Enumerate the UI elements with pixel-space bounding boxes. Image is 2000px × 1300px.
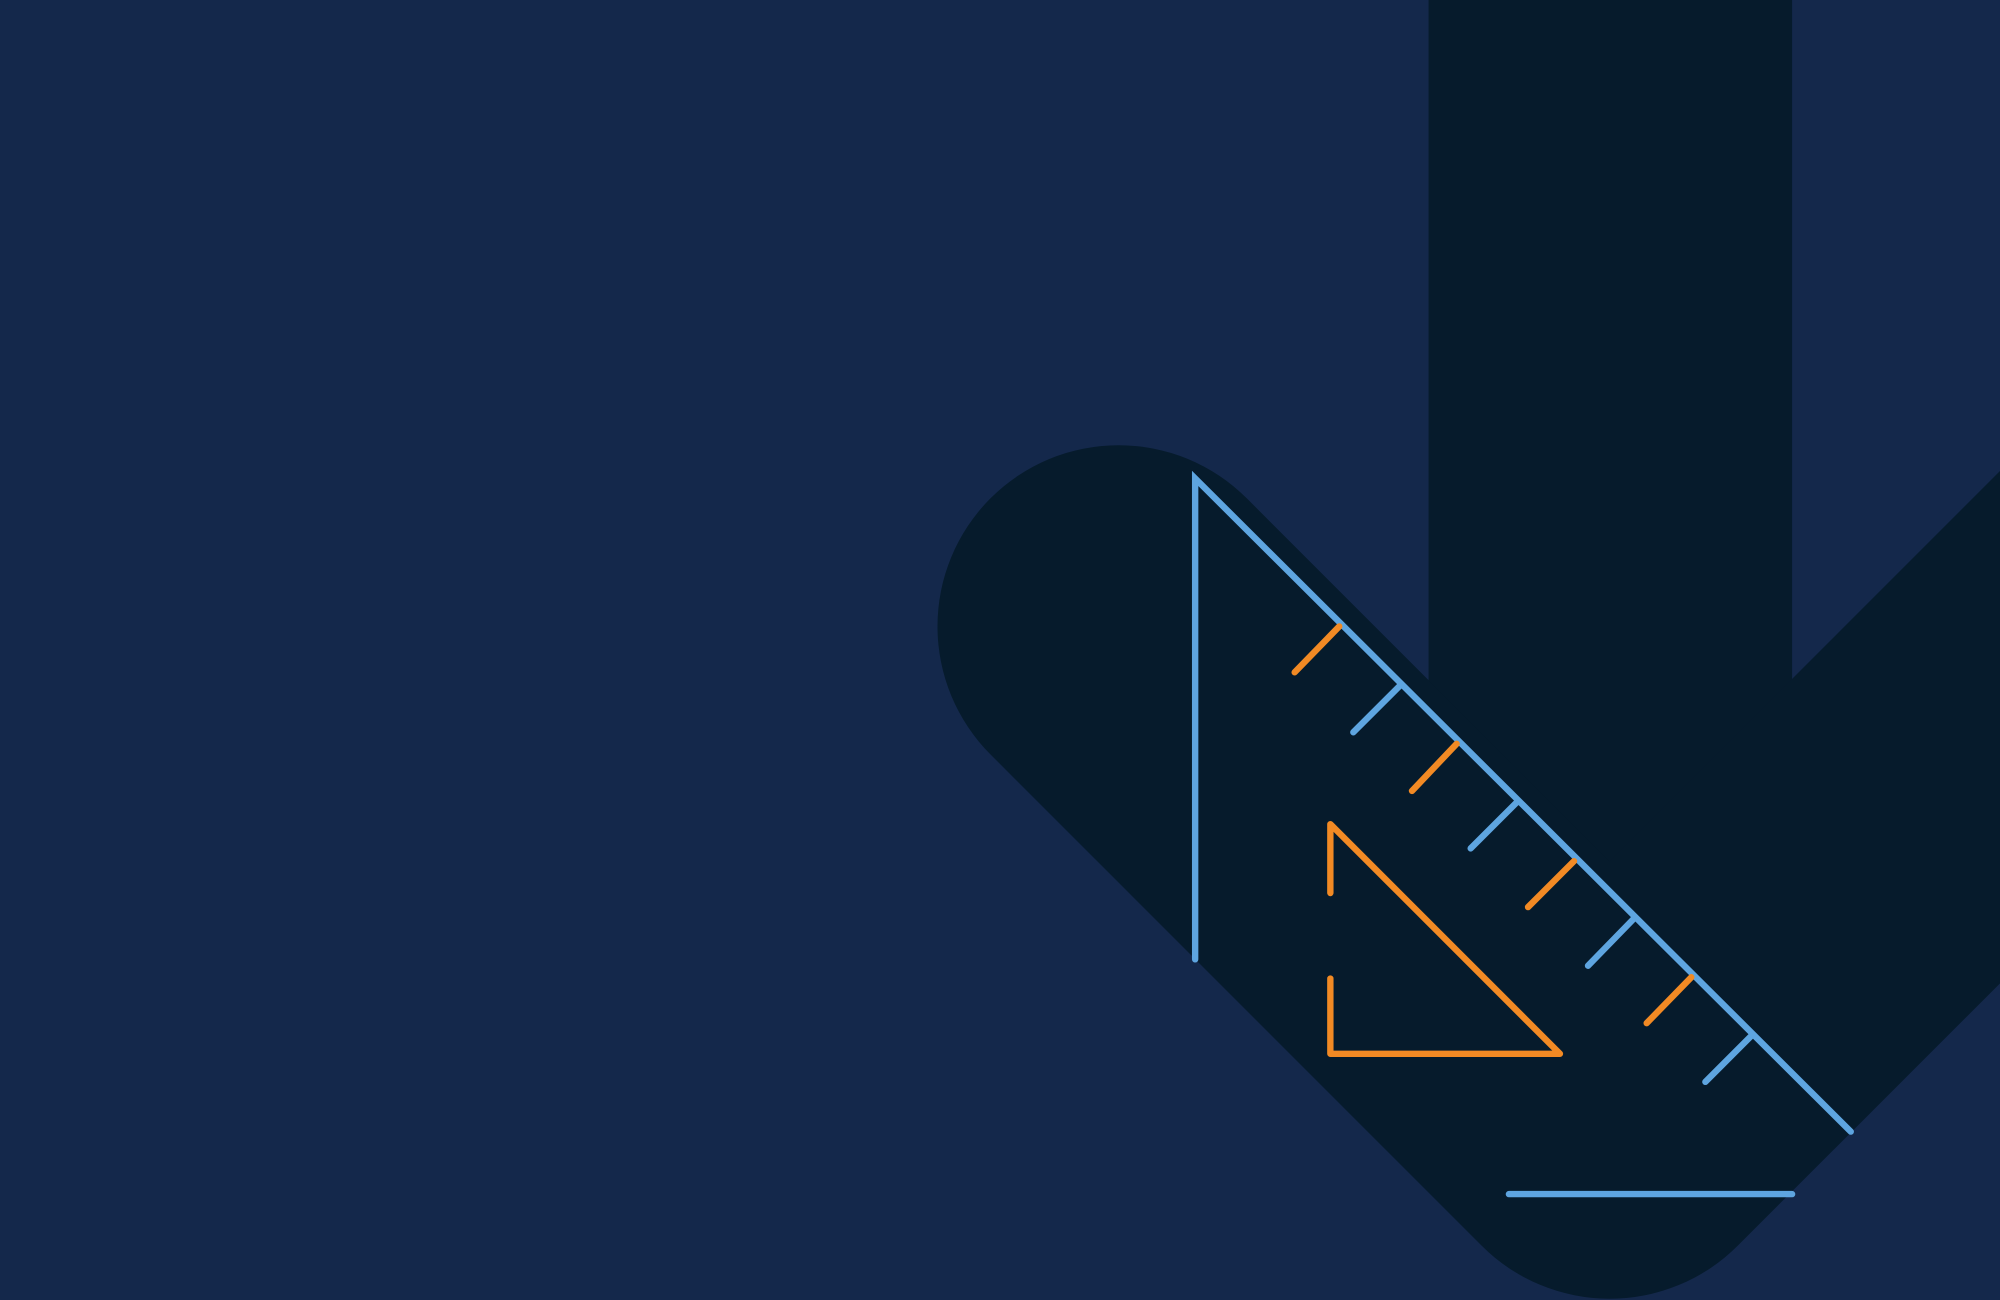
dark down arrow shape: [1119, 0, 2000, 1123]
icon: ruler: [1195, 478, 1851, 1194]
icon: set square triangle: [1330, 824, 1560, 1054]
